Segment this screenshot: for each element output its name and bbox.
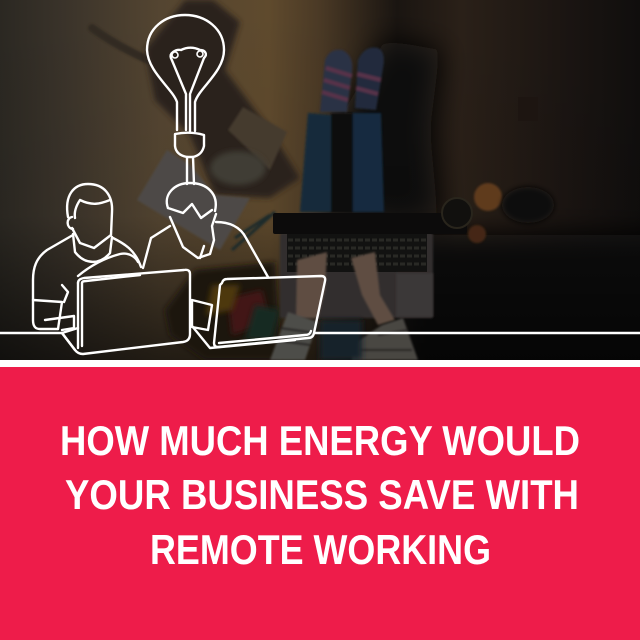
photo: lower right dark floor — [416, 224, 618, 360]
photo: laptop base — [280, 233, 433, 318]
photo: socks — [320, 48, 384, 112]
photo: pencils — [232, 212, 275, 250]
photo: cup — [442, 198, 472, 228]
photo: keyboard — [287, 233, 427, 272]
photo: cat's light patch — [210, 151, 266, 185]
photo: paper behind cat — [228, 107, 287, 170]
icon: lightbulb — [147, 15, 224, 184]
title: REMOTE WORKING — [150, 526, 491, 573]
photo: jeans legs — [300, 113, 384, 213]
background photo: person working on a wooden floor — [0, 0, 640, 395]
red title panel — [0, 367, 640, 640]
photo: cat's body — [145, 0, 300, 198]
photo: gap between legs — [331, 113, 353, 213]
photo: hands — [296, 252, 395, 325]
line illustration: two people, laptops and a lightbulb — [0, 15, 640, 354]
photo: striped sleeves — [270, 312, 418, 360]
ground line — [0, 332, 640, 334]
title — [60, 417, 580, 573]
photo: notebook — [137, 150, 250, 250]
photo: cat tail — [92, 28, 148, 60]
photo: person's lap — [320, 320, 362, 360]
photo: person's shadow — [330, 40, 440, 220]
icon: right laptop — [192, 276, 325, 348]
title: YOUR BUSINESS SAVE WITH — [65, 471, 579, 518]
photo: colourful drawing — [165, 262, 280, 360]
photo: wooden block — [518, 97, 538, 121]
photo: touchpad — [396, 273, 433, 317]
photo: apples — [474, 183, 502, 211]
icon: right person — [143, 183, 268, 277]
white separator band — [0, 360, 640, 367]
icon: left laptop — [62, 270, 190, 354]
photo: bottom fade — [0, 226, 421, 360]
photo: keyboard keys — [288, 240, 426, 264]
photo: fruit shadow — [502, 187, 554, 223]
photo: laptop screen — [273, 213, 467, 234]
icon: left person — [33, 184, 141, 330]
